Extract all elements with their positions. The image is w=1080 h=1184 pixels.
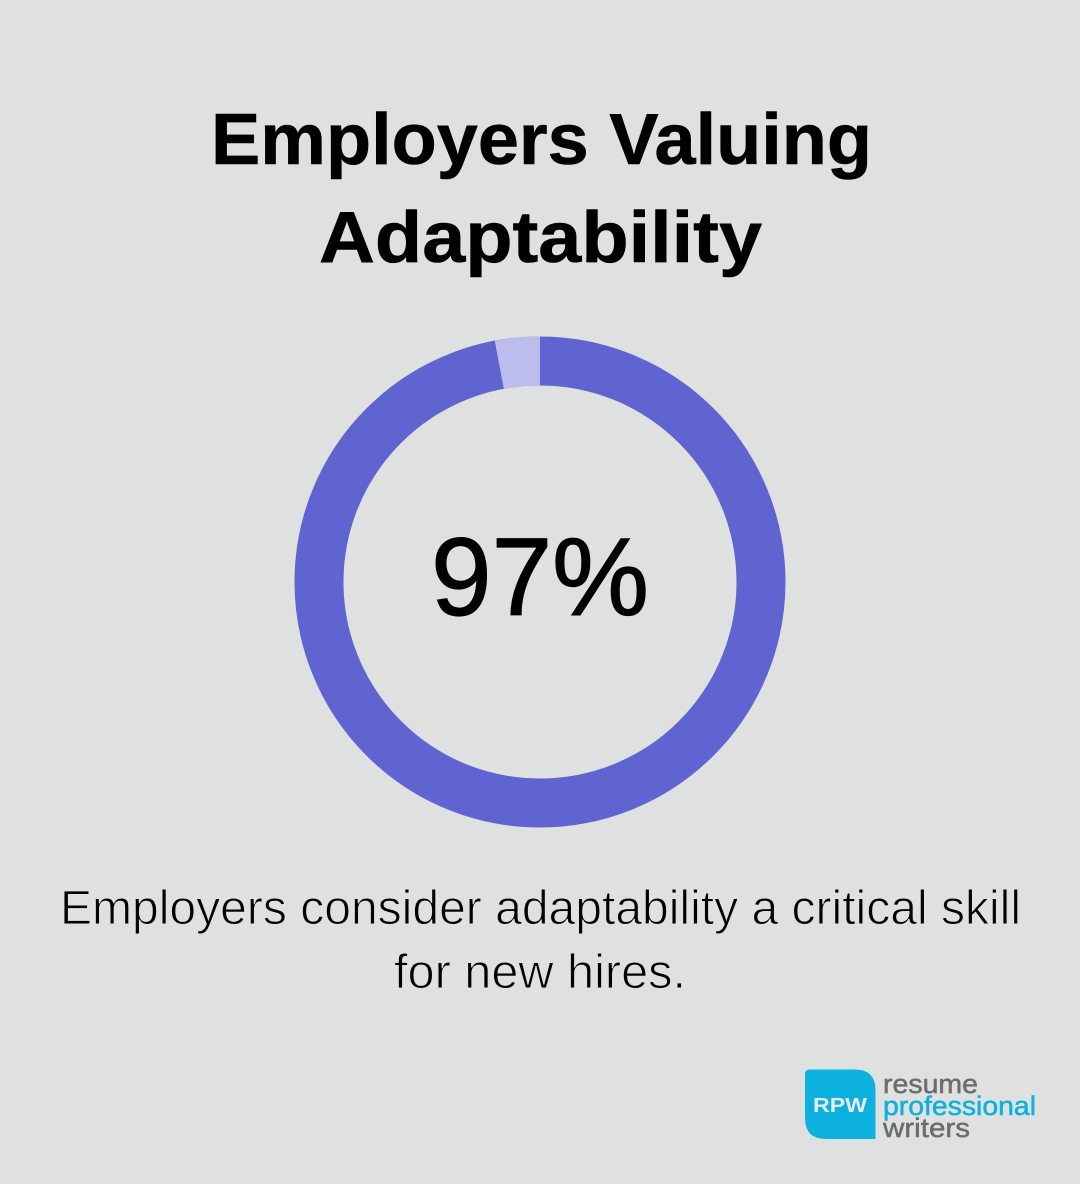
donut remainder segment: 3% <box>495 336 540 389</box>
title: Adaptability <box>319 198 762 278</box>
description text <box>60 882 1021 999</box>
logo wordmark <box>882 1069 1036 1143</box>
logo wordmark: writers <box>882 1113 970 1143</box>
logo badge <box>805 1070 876 1139</box>
center value: 97% <box>431 516 649 639</box>
logo badge initials: RPW <box>813 1094 868 1117</box>
title <box>211 100 872 278</box>
title: Employers Valuing <box>211 100 872 180</box>
description text: for new hires. <box>394 946 686 999</box>
logo: resume professional writers <box>805 1069 1036 1143</box>
donut chart: 97% <box>319 336 761 803</box>
logo wordmark: resume <box>883 1069 978 1099</box>
logo wordmark: professional <box>883 1091 1036 1121</box>
description text: Employers consider adaptability a critical skill <box>60 882 1021 935</box>
